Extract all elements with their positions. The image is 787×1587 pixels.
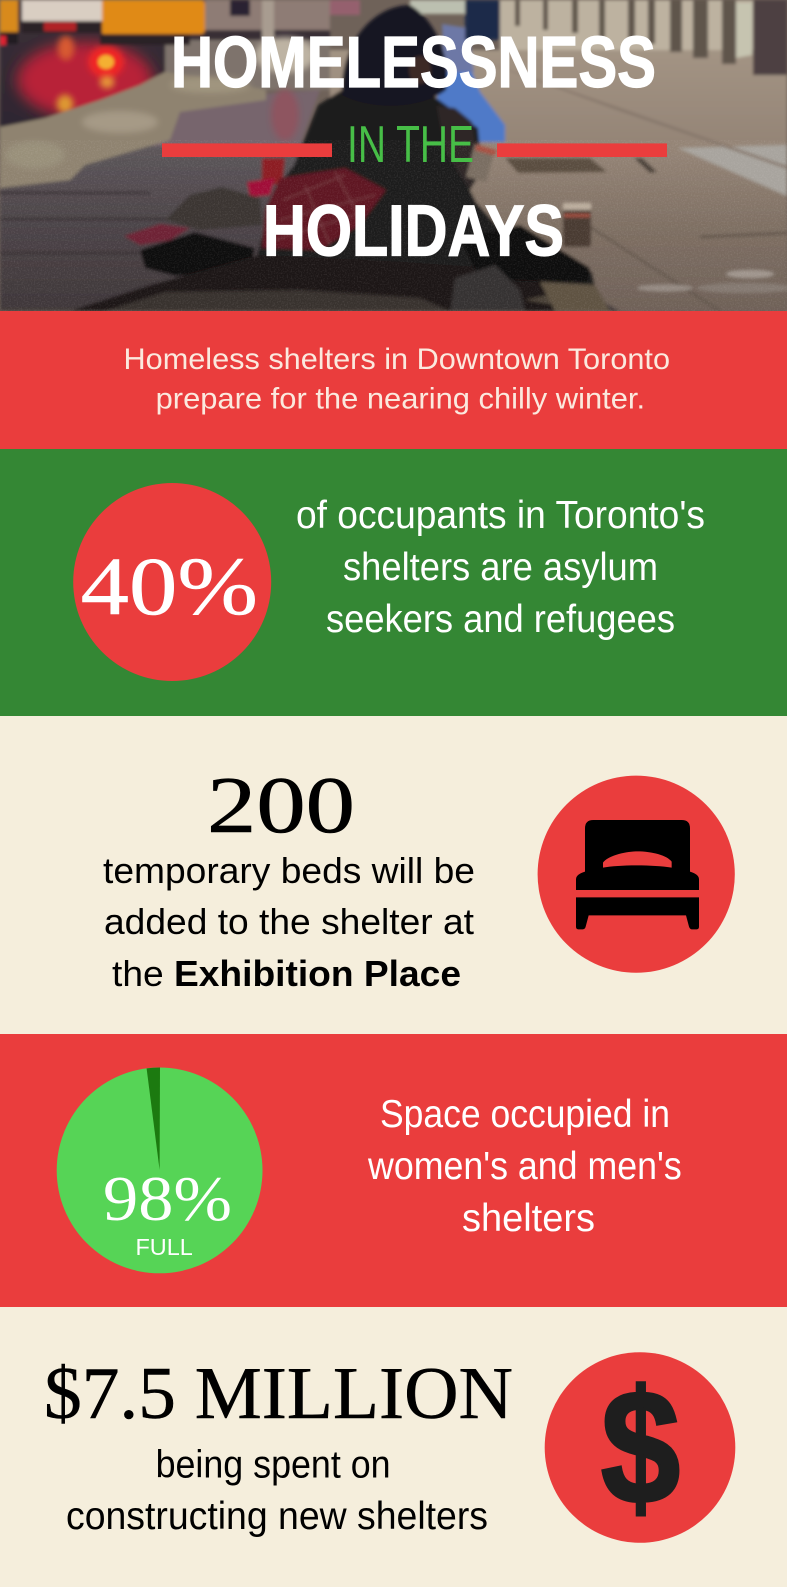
heading bar: right [497, 143, 667, 157]
text block: new shelters [66, 1444, 488, 1538]
stat number: 200: 200 [207, 760, 355, 850]
pie chart: 98% full [57, 1068, 262, 1273]
panel: occupancy statistic [0, 1034, 787, 1307]
heading: IN THE: IN THE [347, 116, 474, 174]
text block: space occupied: women's and men's [367, 1145, 682, 1188]
stat number: $7.5 million: $7.5 MILLION [44, 1353, 513, 1435]
heading bar: left [162, 143, 332, 157]
panel: hero photo background [0, 0, 787, 311]
text block: asylum seekers: of occupants in Toronto's [296, 494, 705, 537]
text block: temporary beds: the Exhibition Place [112, 953, 461, 994]
pie chart: 98% full: FULL [136, 1234, 193, 1260]
text block: space occupied [367, 1093, 682, 1240]
panel: asylum seekers statistic [0, 449, 787, 716]
text block: intro [124, 343, 670, 416]
panel: temporary beds statistic [0, 716, 787, 1034]
text block: intro: prepare for the nearing chilly winter. [156, 382, 645, 416]
text block: asylum seekers: seekers and refugees [326, 598, 675, 641]
panel: intro band [0, 311, 787, 449]
title: HOLIDAYS: HOLIDAYS [263, 192, 564, 272]
panel: funding statistic [0, 1307, 787, 1587]
stat badge: 40% [73, 483, 271, 681]
text block: space occupied: Space occupied in [380, 1093, 670, 1136]
text block: asylum seekers: shelters are asylum [343, 546, 658, 589]
text block: space occupied: shelters [462, 1197, 595, 1240]
icon: dollar sign in red circle: $ [601, 1358, 680, 1538]
stat badge: 40%: 40% [81, 540, 258, 632]
title: HOMELESSNESS: HOMELESSNESS [171, 23, 656, 103]
icon: dollar sign in red circle [545, 1352, 735, 1543]
text block: temporary beds: temporary beds will be [103, 850, 475, 891]
text block: intro: Homeless shelters in Downtown Toronto [124, 343, 670, 376]
text block: asylum seekers [296, 494, 705, 641]
text block: new shelters: being spent on [156, 1444, 391, 1486]
pie chart: 98% full: 98% [103, 1163, 232, 1234]
icon: bed in red circle [538, 776, 735, 973]
text block: temporary beds [103, 850, 475, 994]
text block: temporary beds: added to the shelter at [104, 901, 474, 942]
text block: new shelters: constructing new shelters [66, 1495, 488, 1538]
